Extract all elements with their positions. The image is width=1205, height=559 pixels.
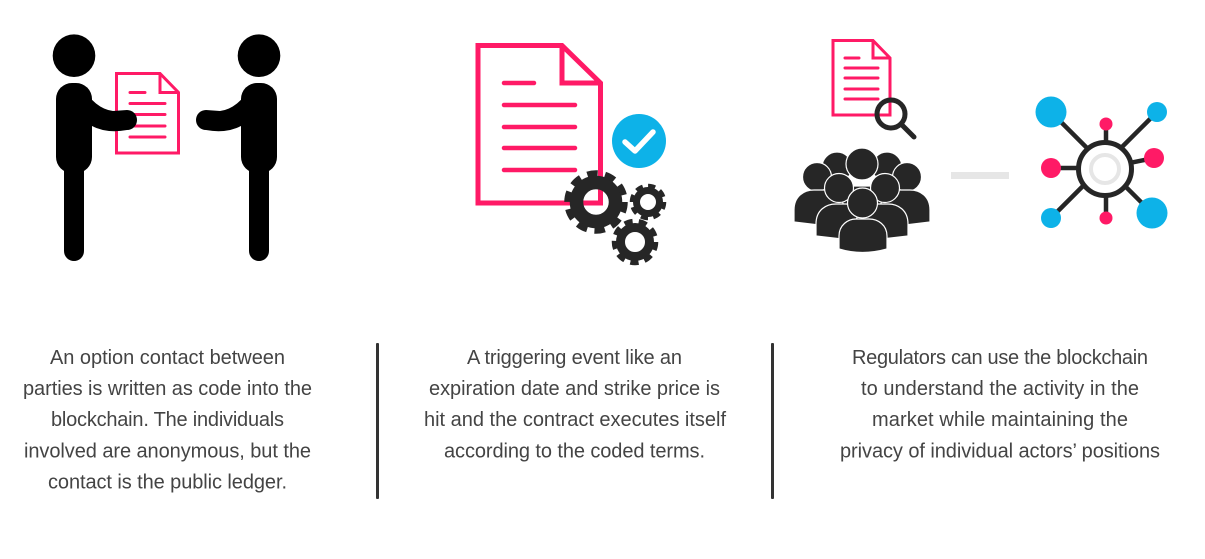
icon: pink contract document [116,74,178,153]
text: step one description: blockchain. The individuals [51,409,284,431]
icon: network hub [1036,96,1168,228]
text: step two description: expiration date and strike price is [429,378,720,400]
icon: left person [53,34,137,261]
connector bar [951,172,1009,179]
divider: right [771,343,774,499]
icon: document under magnifier [833,40,914,137]
icon: magnifier [877,100,914,137]
text: step one description: An option contact between [50,347,285,369]
divider: left [376,343,379,499]
text: step two description: according to the coded terms. [444,440,705,462]
text: step three description: to understand the activity in the [861,378,1139,400]
text: step two description: A triggering event like an [467,347,682,369]
icon: small pink document [833,40,890,115]
panel: contract self-executes [424,46,726,462]
text: step two description [424,347,726,462]
panel: parties exchange contract [23,34,312,494]
text: step two description: hit and the contract executes itself [424,409,726,431]
icon: blue check badge [612,114,666,168]
text: step one description: involved are anonymous, but the [24,440,311,462]
text: step three description [840,347,1160,462]
icon: two people exchanging document [53,34,280,261]
icon: large document with gears and check [478,46,666,262]
text: step three description: market while maintaining the [872,409,1128,431]
text: step three description: Regulators can use the blockchain [852,347,1148,369]
icon: gears [568,174,664,262]
icon: pink document [478,46,600,203]
panel: regulators view [794,40,1168,462]
icon: right person [196,34,280,261]
text: step one description [23,347,312,494]
text: step one description: parties is written as code into the [23,378,312,400]
text: step one description: contact is the public ledger. [48,472,287,494]
icon: crowd of people [794,148,930,252]
text: step three description: privacy of individual actors’ positions [840,440,1160,462]
